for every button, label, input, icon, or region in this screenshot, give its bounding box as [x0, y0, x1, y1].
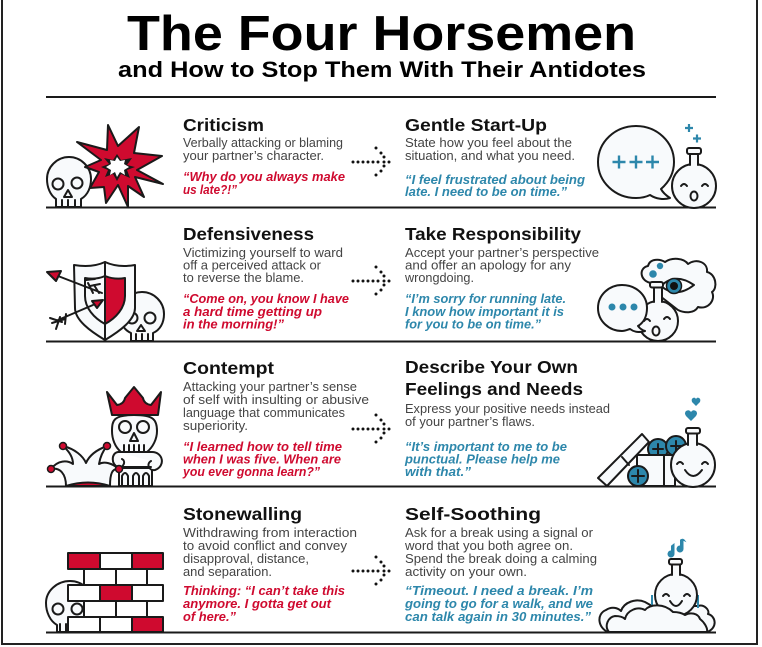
description: gentle start-up: situation, and what you need. [405, 148, 575, 163]
description: criticism: Verbally attacking or blaming [183, 135, 343, 150]
quote: gentle start-up [405, 172, 585, 199]
quote: criticism: us late?!” [183, 182, 237, 197]
description: stonewalling: Withdrawing from interaction [183, 525, 357, 540]
panel: criticism [47, 115, 345, 207]
description: contempt: of self with insulting or abusive [183, 392, 369, 407]
panel: stonewalling [46, 504, 357, 632]
quote: defensiveness: “Come on, you know I have [183, 291, 349, 306]
quote: contempt [182, 439, 342, 479]
description: contempt [183, 379, 369, 433]
description: contempt: Attacking your partner’s sense [183, 379, 357, 394]
heading: self-soothing: Self-Soothing [405, 504, 541, 524]
heading: stonewalling: Stonewalling [183, 504, 302, 524]
heading: defensiveness: Defensiveness [183, 224, 314, 244]
description: contempt: superiority. [183, 418, 248, 433]
quote: self-soothing: can talk again in 30 minutes.” [405, 609, 592, 624]
description: take responsibility: wrongdoing. [404, 270, 474, 285]
heading: criticism: Criticism [183, 115, 264, 135]
description: defensiveness: off a perceived attack or [183, 258, 322, 272]
quote: contempt: “I learned how to tell time [183, 439, 342, 454]
icon: skull and explosion [47, 125, 163, 207]
description: describe your own feelings and needs [405, 401, 610, 429]
description: self-soothing: activity on your own. [405, 564, 527, 579]
heading: describe your own feelings and needs: Feelings and Needs [405, 379, 583, 399]
heading: take responsibility: Take Responsibility [405, 224, 581, 244]
description: self-soothing: Ask for a break using a signal or [405, 525, 594, 540]
panel: take responsibility [404, 224, 715, 341]
quote: criticism [183, 169, 345, 197]
description: stonewalling: and separation. [183, 564, 272, 579]
quote: defensiveness: in the morning!” [183, 316, 284, 332]
panel: contempt [48, 358, 369, 486]
quote: stonewalling: Thinking: “I can’t take this [183, 583, 345, 598]
description: describe your own feelings and needs: of your partner’s flaws. [405, 414, 535, 429]
quote: self-soothing: “Timeout. I need a break. I’m [405, 583, 593, 598]
arrow: defensiveness to take responsibility [352, 266, 390, 296]
icon: thought cloud, eye, flask and speech bubble [598, 259, 715, 341]
description: defensiveness: Victimizing yourself to ward [183, 245, 343, 260]
quote: describe your own feelings and needs [404, 439, 567, 479]
panel: defensiveness [47, 224, 349, 341]
quote: contempt: you ever gonna learn?” [182, 464, 320, 479]
panel: self-soothing [404, 504, 715, 632]
quote: take responsibility [405, 291, 566, 332]
title [118, 7, 646, 82]
quote: defensiveness: a hard time getting up [183, 304, 322, 319]
quote: self-soothing [404, 583, 593, 624]
quote: take responsibility: for you to be on time.” [405, 316, 541, 332]
quote: contempt: when I was five. When are [183, 452, 341, 466]
description: self-soothing [404, 525, 597, 579]
description: take responsibility [404, 245, 599, 285]
icon: skull behind brick wall [46, 553, 163, 632]
description: self-soothing: Spend the break doing a calming [405, 551, 597, 566]
description: criticism [183, 135, 343, 163]
heading: describe your own feelings and needs [405, 357, 583, 399]
title: and How to Stop Them With Their Antidotes [118, 57, 646, 82]
icon: flask in bubble bath with music notes [599, 539, 715, 632]
icon: open box with plus balls and smiling flask [598, 398, 715, 487]
quote: describe your own feelings and needs: with that.” [405, 464, 472, 479]
description: take responsibility: and offer an apology for any [405, 258, 572, 272]
quote: describe your own feelings and needs: “It’s important to me to be [405, 439, 567, 454]
arrow: stonewalling to self-soothing [352, 556, 390, 586]
heading: gentle start-up: Gentle Start-Up [405, 115, 547, 135]
description: self-soothing: word that you both agree on. [404, 538, 573, 553]
quote: gentle start-up: “I feel frustrated about being [405, 172, 585, 187]
description: describe your own feelings and needs: Express your positive needs instead [405, 401, 610, 416]
description: contempt: language that communicates [183, 405, 345, 420]
arrow: contempt to describe your own feelings [352, 414, 390, 444]
description: gentle start-up: State how you feel about the [405, 135, 572, 150]
panel: gentle start-up [405, 115, 716, 208]
icon: jester hat, crowned skull and column [48, 387, 162, 486]
panel: describe your own feelings and needs [404, 357, 715, 487]
quote: gentle start-up: late. I need to be on time.” [405, 184, 567, 199]
description: criticism: your partner’s character. [183, 148, 324, 163]
quote: self-soothing: going to go for a walk, and we [404, 596, 593, 611]
quote: take responsibility: I know how important it is [405, 304, 564, 319]
quote: describe your own feelings and needs: punctual. Please help me [404, 452, 560, 466]
heading: contempt: Contempt [183, 358, 274, 378]
description: take responsibility: Accept your partner’s perspective [405, 245, 599, 260]
arrow: criticism to gentle start-up [352, 146, 390, 176]
quote: stonewalling: anymore. I gotta get out [183, 596, 332, 611]
quote: take responsibility: “I’m sorry for running late. [405, 291, 566, 306]
quote: stonewalling [183, 583, 345, 624]
quote: defensiveness [183, 291, 349, 332]
description: stonewalling [183, 525, 357, 579]
quote: criticism: “Why do you always make [183, 169, 345, 184]
description: defensiveness [183, 245, 343, 285]
icon: speech bubble and flask [598, 124, 716, 208]
title: The Four Horsemen [127, 7, 636, 61]
description: stonewalling: disapproval, distance, [183, 551, 309, 566]
description: gentle start-up [405, 135, 575, 163]
description: stonewalling: to avoid conflict and convey [183, 538, 348, 553]
icon: shield, arrows and skull [47, 262, 164, 341]
description: defensiveness: to reverse the blame. [183, 270, 304, 285]
heading: describe your own feelings and needs: Describe Your Own [405, 357, 578, 377]
quote: stonewalling: of here.” [183, 609, 236, 624]
